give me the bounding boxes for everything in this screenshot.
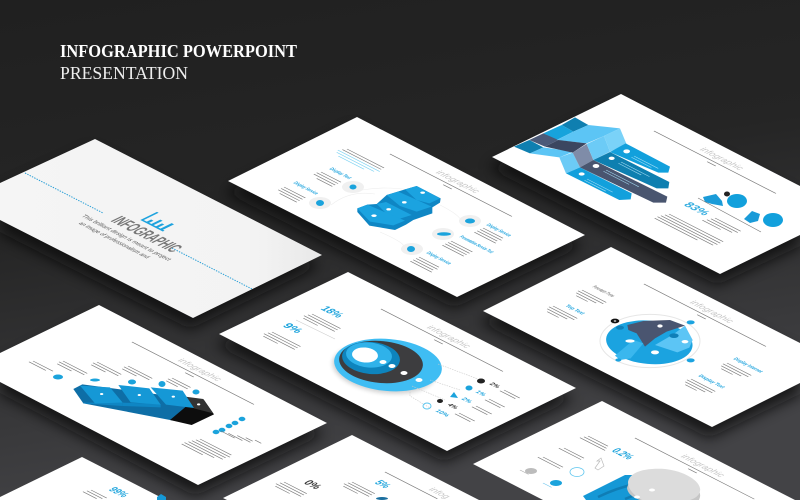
chart: 3D steps — [73, 384, 214, 425]
slide header — [650, 125, 787, 195]
bullets — [213, 417, 245, 434]
text blocks: Display Text — [327, 167, 353, 180]
dotted divider right — [172, 248, 252, 289]
paragraph — [182, 437, 233, 463]
chart fragment — [376, 497, 388, 500]
icon: bar chart — [142, 212, 179, 231]
panel: puzzle chart slide — [483, 247, 800, 427]
legend icons — [423, 378, 485, 409]
icon: flask — [595, 458, 604, 470]
icon circles — [309, 181, 481, 255]
chart: nested circles — [329, 334, 444, 400]
panel: bottom left slide — [0, 457, 166, 500]
labels: Display Text — [696, 374, 726, 389]
slide header: infographic — [433, 169, 483, 194]
panel: 3D blocks slide — [0, 305, 327, 485]
legend labels — [520, 470, 552, 487]
panel: arrows slide — [492, 94, 800, 274]
legend values: 2% — [459, 397, 474, 404]
heading — [60, 41, 297, 83]
legend: grey marker — [525, 468, 537, 474]
cover subtitle: an image of professionalism and — [76, 221, 151, 260]
chart: stacked discs — [583, 469, 700, 500]
stat: 18%: 18% — [317, 305, 346, 319]
labels: Display Internet — [731, 357, 764, 374]
slide header: infographic — [687, 299, 737, 324]
faint connector arcs — [331, 188, 462, 249]
text blocks: Display Service — [484, 223, 512, 238]
badge: top stat circle — [727, 194, 747, 208]
slide header: infog — [426, 486, 453, 500]
panel: bottom centre slide — [223, 435, 479, 500]
cover title: INFOGRAPHIC — [106, 214, 187, 255]
panel: stepped blocks slide — [228, 117, 585, 297]
chart: folded ribbon arrows — [514, 117, 670, 203]
stat: 5%: 5% — [371, 479, 393, 490]
stat text — [273, 481, 375, 498]
text blocks: Display Service — [291, 181, 319, 196]
stat text — [655, 198, 761, 247]
slide header — [377, 303, 514, 373]
icon: ribbon — [744, 211, 760, 223]
slide header — [128, 336, 265, 406]
text blocks: Presentation Service Text — [457, 235, 495, 254]
icon: person — [724, 192, 730, 196]
legend values: 2% — [487, 382, 502, 389]
panel: stacked discs slide — [473, 401, 795, 500]
connector lines — [410, 364, 478, 408]
slide header: infographic — [678, 453, 728, 478]
slide header — [385, 466, 453, 500]
panel: cover slide — [0, 139, 322, 318]
slide header: infographic — [424, 324, 474, 349]
slide header: infographic — [175, 357, 225, 382]
slide header: infographic — [697, 146, 747, 171]
heading: PRESENTATION — [60, 63, 188, 83]
labels — [543, 285, 764, 396]
stat text — [538, 435, 611, 469]
step icons — [53, 374, 200, 394]
stat: 9%: 9% — [279, 322, 305, 335]
panel: circle chart slide — [219, 272, 576, 451]
chart: puzzle circle — [600, 314, 700, 368]
bullet text — [221, 427, 261, 447]
slide header — [631, 432, 766, 500]
legend: blue marker — [550, 480, 562, 486]
legend values: 4% — [445, 403, 460, 410]
chart fragment — [157, 494, 166, 500]
chart: 3D stepped blocks — [357, 186, 441, 230]
icon: chair — [703, 194, 723, 206]
icon: cloud — [570, 468, 584, 476]
panel shadows — [0, 105, 800, 496]
legend values — [433, 382, 502, 418]
text blocks: Display Service — [424, 251, 452, 266]
stat text — [83, 489, 107, 500]
arrow captions — [584, 156, 658, 193]
slide header — [386, 148, 523, 218]
labels: Presentation Theme — [590, 285, 616, 298]
badge: lower stat circle — [763, 213, 783, 227]
stat: 83% — [680, 201, 712, 217]
step text — [29, 360, 191, 390]
legend values: 1% — [473, 390, 488, 397]
text blocks — [275, 148, 512, 272]
stat: 0.2%: 0.2% — [608, 447, 636, 461]
slide header — [640, 278, 777, 348]
legend text — [455, 389, 520, 422]
stat: 0%: 0% — [300, 479, 324, 491]
legend values: 10% — [433, 409, 451, 418]
heading: INFOGRAPHIC POWERPOINT — [60, 41, 297, 61]
dotted divider left — [25, 173, 103, 213]
icons — [316, 184, 475, 252]
cover subtitle: This brilliant design is meant to project — [79, 214, 173, 262]
labels: Top Text — [563, 304, 586, 316]
stat text — [261, 313, 340, 351]
